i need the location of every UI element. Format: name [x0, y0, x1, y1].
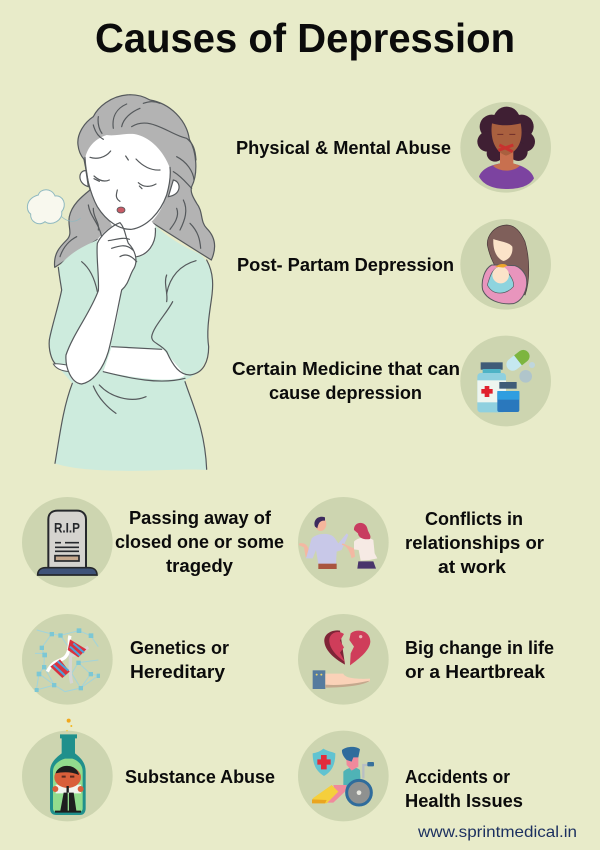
hair: [54, 95, 215, 267]
face lines: [85, 151, 170, 229]
icon: mother and baby: [460, 219, 551, 310]
dress outlines: [49, 228, 213, 469]
label: conflicts: Conflicts in: [425, 509, 523, 529]
label: genetics: Hereditary: [130, 662, 225, 682]
arm and hand outlines: [66, 223, 137, 384]
website url: www.sprintmedical.in: [417, 824, 577, 841]
hair lines: [60, 102, 201, 257]
label: certain medicine: cause depression: [269, 383, 422, 403]
label: passing away: Passing away of: [129, 508, 272, 528]
label: accidents: [405, 767, 523, 811]
label: substance abuse: Substance Abuse: [125, 767, 275, 787]
label: passing away: [115, 508, 284, 576]
icon: woman with covered mouth: [460, 102, 551, 193]
label: big change: [405, 638, 554, 682]
label: genetics: [130, 638, 229, 682]
icon: gravestone: [22, 497, 113, 588]
icon: medicine bottles and pills: [460, 336, 551, 426]
icon: man in bottle: [22, 719, 113, 821]
illustration: sighing woman: [27, 95, 215, 471]
neck: [110, 220, 156, 257]
dress: [49, 225, 212, 471]
label: certain medicine: [232, 359, 460, 403]
label: passing away: tragedy: [166, 556, 233, 576]
right arm: [103, 347, 185, 380]
label: big change: Big change in life: [405, 638, 554, 658]
label: conflicts: [405, 509, 544, 577]
sigh cloud: [27, 190, 81, 224]
label: post-partum depression: Post- Partam Depression: [237, 255, 454, 275]
forearm and hand: [66, 223, 136, 384]
icon: wheelchair and shield: [298, 731, 389, 821]
label: passing away: closed one or some: [115, 532, 284, 552]
right ear: [168, 180, 179, 197]
mouth: [117, 207, 125, 213]
face: [85, 134, 170, 229]
label: certain medicine: Certain Medicine that can: [232, 359, 460, 379]
left ear: [80, 171, 88, 187]
icon: broken heart on hand: [298, 614, 389, 705]
icon: gravestone: R.I.P: [54, 519, 80, 535]
label: conflicts: relationships or: [405, 533, 544, 553]
label: physical and mental abuse: Physical & Mental Abuse: [236, 138, 451, 158]
title: Causes of Depression: [95, 15, 515, 61]
icon: DNA network: [22, 614, 113, 705]
label: genetics: Genetics or: [130, 638, 229, 658]
label: big change: or a Heartbreak: [405, 662, 546, 682]
left side of folded arm: [53, 364, 72, 372]
label: accidents: Accidents or: [405, 767, 510, 787]
label: conflicts: at work: [438, 557, 507, 577]
icon: arguing couple: [298, 497, 389, 588]
label: accidents: Health Issues: [405, 791, 523, 811]
